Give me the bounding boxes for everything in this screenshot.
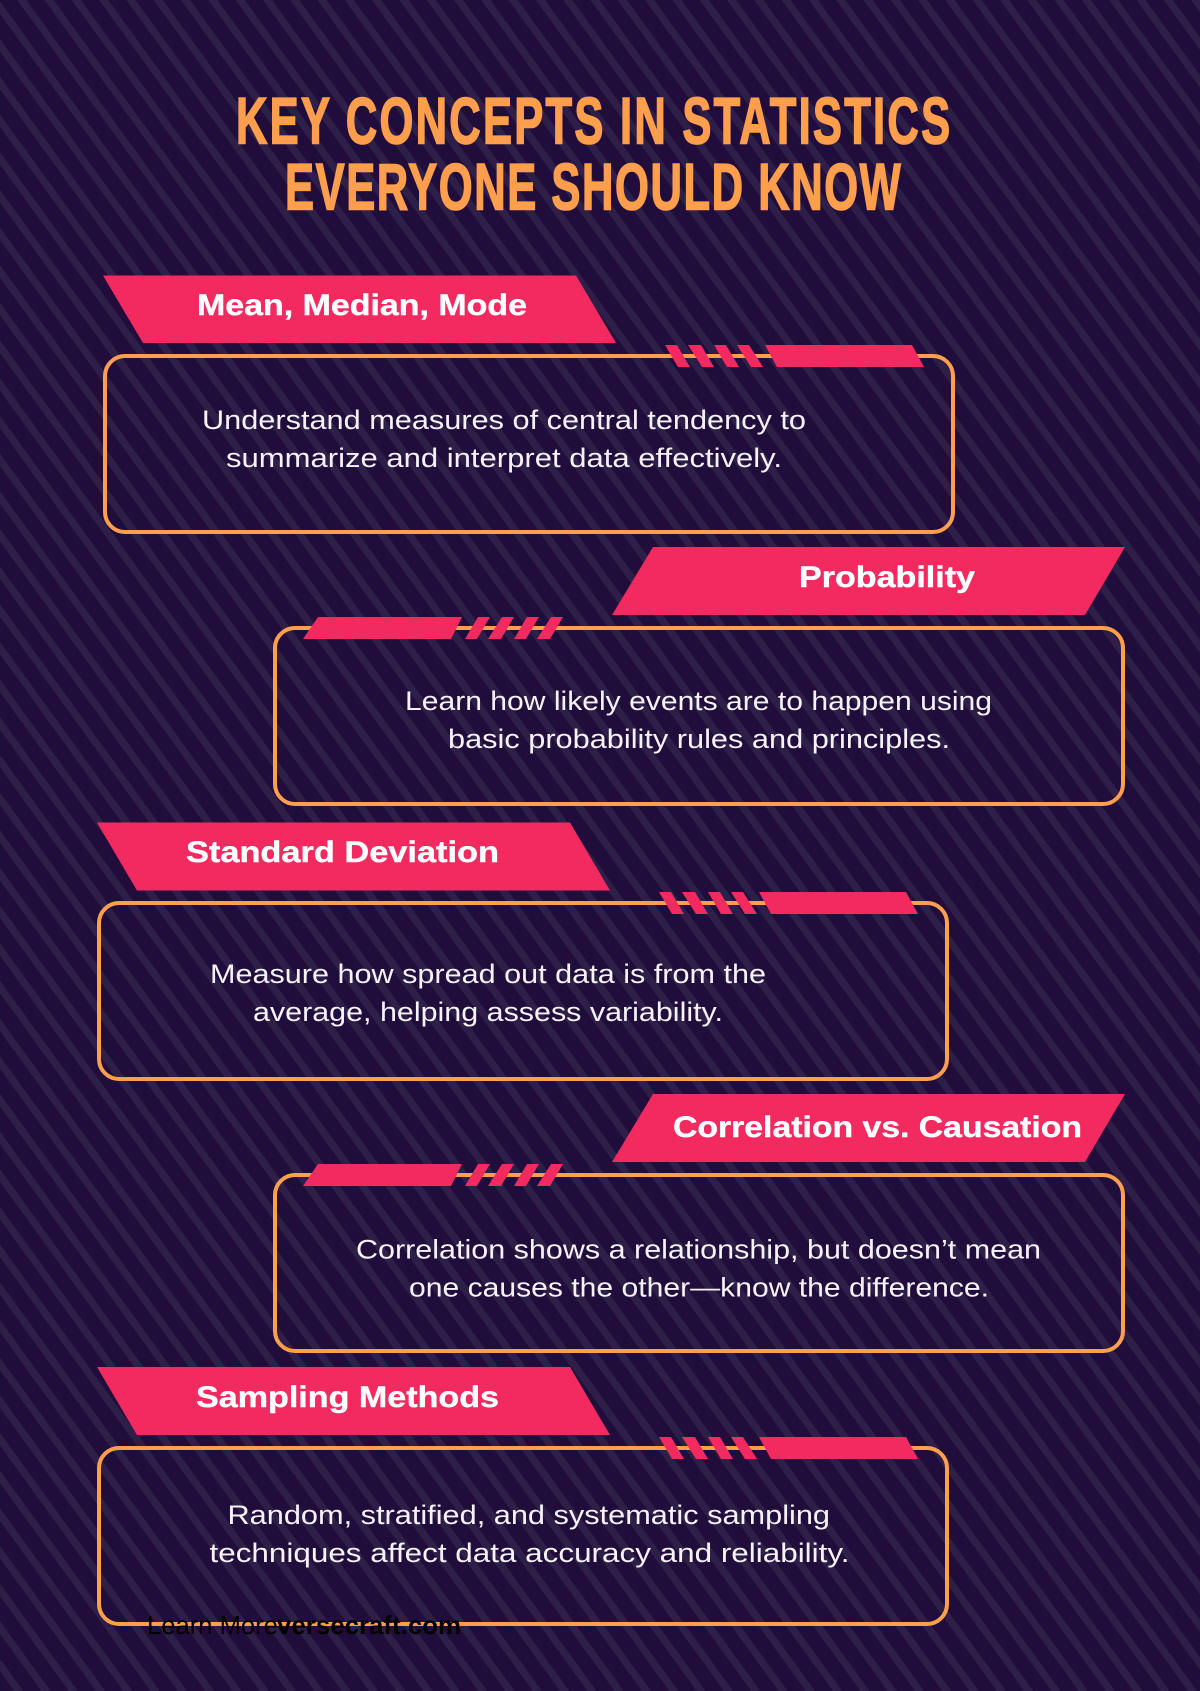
banner: sampling methods	[97, 1367, 610, 1435]
description: techniques affect data accuracy and reliability.	[210, 1538, 850, 1568]
accent bars	[659, 892, 918, 914]
title	[236, 83, 950, 224]
footer link	[147, 1612, 461, 1640]
title: KEY CONCEPTS IN STATISTICS	[236, 83, 950, 158]
footer link: Learn More	[147, 1612, 278, 1640]
card: correlation vs. causation	[275, 1175, 1123, 1351]
description: one causes the other—know the difference.	[409, 1272, 989, 1302]
panel: mean, median, mode	[103, 276, 953, 532]
footer link: versecraft.com	[277, 1612, 461, 1640]
description: summarize and interpret data effectively.	[226, 443, 782, 473]
description	[405, 686, 992, 754]
description	[210, 1500, 850, 1568]
description	[210, 959, 766, 1027]
accent bars	[665, 345, 924, 367]
accent bars	[303, 617, 563, 639]
banner: probability: Probability	[799, 561, 975, 594]
banner: mean, median, mode: Mean, Median, Mode	[197, 289, 527, 322]
description: average, helping assess variability.	[253, 997, 723, 1027]
description: Correlation shows a relationship, but doesn’t mean	[356, 1234, 1041, 1264]
description: Random, stratified, and systematic sampling	[228, 1500, 830, 1530]
banner: sampling methods: Sampling Methods	[196, 1381, 499, 1414]
banner: mean, median, mode	[103, 276, 616, 343]
description: Understand measures of central tendency to	[202, 405, 806, 435]
description: basic probability rules and principles.	[448, 724, 950, 754]
accent bars	[303, 1164, 563, 1186]
card: sampling methods	[99, 1448, 947, 1624]
card: standard deviation	[99, 903, 947, 1079]
accent bars	[659, 1437, 918, 1459]
card: probability	[275, 628, 1123, 804]
banner: probability	[612, 547, 1125, 615]
panel: sampling methods	[97, 1367, 947, 1624]
banner: correlation vs. causation: Correlation vs. Causation	[673, 1111, 1082, 1144]
banner: standard deviation: Standard Deviation	[186, 836, 499, 869]
description: Learn how likely events are to happen using	[405, 686, 992, 716]
description	[356, 1234, 1041, 1302]
description: Measure how spread out data is from the	[210, 959, 766, 989]
description	[202, 405, 806, 473]
banner: standard deviation	[97, 822, 610, 890]
banner: correlation vs. causation	[612, 1094, 1125, 1162]
panel: probability	[275, 547, 1125, 804]
title: EVERYONE SHOULD KNOW	[285, 149, 901, 224]
card: mean, median, mode	[105, 356, 953, 532]
panel: correlation vs. causation	[275, 1094, 1125, 1351]
panel: standard deviation	[97, 822, 947, 1079]
